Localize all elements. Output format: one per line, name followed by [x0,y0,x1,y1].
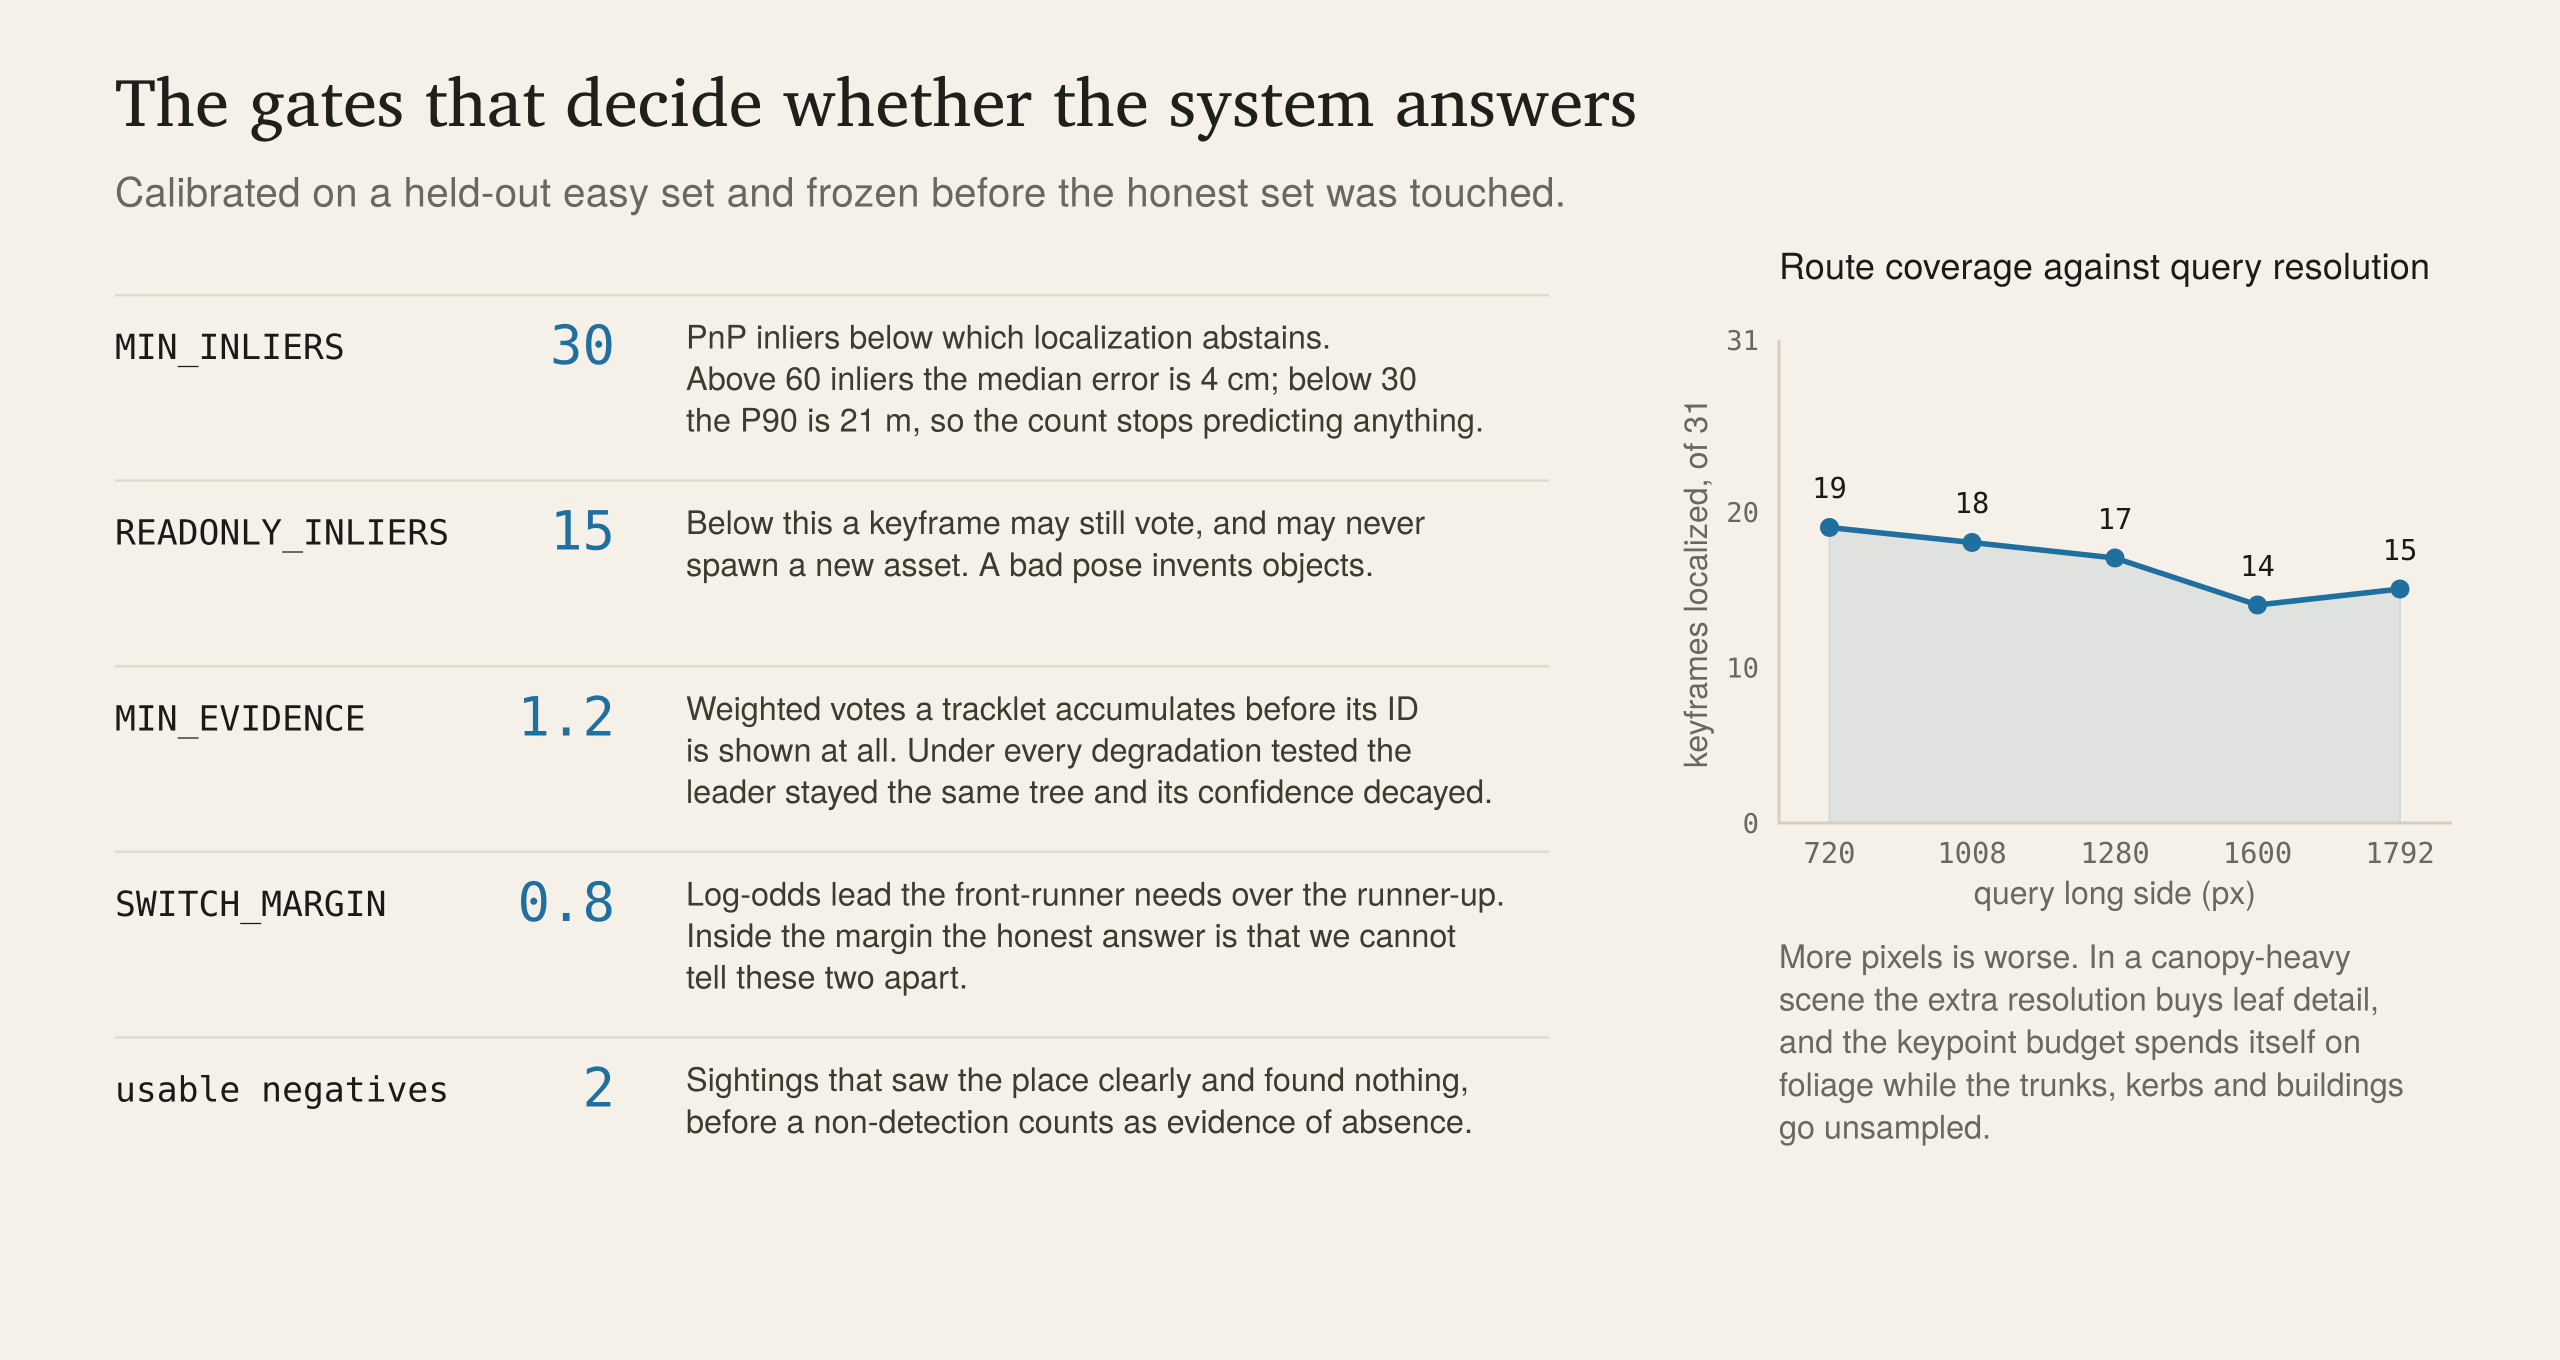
x axis ticks: 1792 [2365,836,2435,870]
row: READONLY_INLIERS: 15 [550,500,615,563]
row: MIN_EVIDENCE: MIN_EVIDENCE [115,699,366,739]
row: MIN_EVIDENCE: is shown at all. Under every degradation tested the [686,725,1412,771]
value labels: 19 [1812,471,1847,505]
row: SWITCH_MARGIN [115,850,1549,999]
line chart: route coverage [1671,326,2452,914]
chart caption [1779,932,2404,1148]
row: SWITCH_MARGIN: Inside the margin the honest answer is that we cannot [686,911,1456,957]
row: READONLY_INLIERS: Below this a keyframe may still vote, and may never [686,498,1425,544]
chart caption: More pixels is worse. In a canopy-heavy [1779,932,2351,978]
chart caption: go unsampled. [1779,1102,1991,1148]
y axis ticks: 0 [1743,809,1759,840]
x axis ticks: 1280 [2080,836,2150,870]
x axis ticks [1803,836,2435,870]
data points [1820,518,2410,614]
row: usable negatives: 2 [582,1057,615,1120]
row: READONLY_INLIERS: spawn a new asset. A bad pose invents objects. [686,540,1374,586]
row: MIN_EVIDENCE [115,665,1549,813]
row: MIN_INLIERS: PnP inliers below which localization abstains. [686,312,1331,358]
y axis ticks: 10 [1726,654,1759,684]
row: MIN_INLIERS: the P90 is 21 m, so the count stops predicting anything. [686,396,1484,442]
value labels: 14 [2240,549,2275,583]
row: MIN_EVIDENCE: leader stayed the same tree and its confidence decayed. [686,767,1493,813]
row: MIN_INLIERS: MIN_INLIERS [115,328,345,368]
y axis ticks [1726,326,1759,840]
row: SWITCH_MARGIN: SWITCH_MARGIN [115,885,386,925]
subtitle: Calibrated on a held-out easy set and frozen before the honest set was touched. [115,162,1566,218]
row: MIN_EVIDENCE: Weighted votes a tracklet accumulates before its ID [686,684,1419,730]
value labels: 17 [2098,502,2132,536]
title: The gates that decide whether the system answers [115,45,1637,156]
row: SWITCH_MARGIN: Log-odds lead the front-runner needs over the runner-up. [686,870,1505,916]
y axis ticks: 20 [1726,498,1759,529]
row: usable negatives: before a non-detection counts as evidence of absence. [686,1097,1473,1143]
axes [1779,340,2452,823]
x axis ticks: 1600 [2223,836,2292,870]
row: MIN_INLIERS [115,294,1549,442]
value labels [1812,471,2417,583]
value labels: 18 [1955,486,1989,520]
chart caption: scene the extra resolution buys leaf detail, [1779,975,2379,1021]
row: READONLY_INLIERS [115,479,1549,586]
value labels: 15 [2383,533,2417,567]
x axis ticks: 1008 [1937,836,2007,870]
row: MIN_INLIERS: 30 [550,314,615,377]
row: usable negatives [115,1036,1549,1143]
area under line [1830,528,2400,823]
row: SWITCH_MARGIN: tell these two apart. [686,953,968,999]
x axis ticks: 720 [1803,836,1856,870]
row: SWITCH_MARGIN: 0.8 [517,871,615,934]
y axis label: keyframes localized, of 31 [1671,398,1717,768]
x axis label: query long side (px) [1974,868,2256,914]
chart caption: and the keypoint budget spends itself on [1779,1017,2361,1063]
chart title: Route coverage against query resolution [1779,239,2430,290]
row: usable negatives: Sightings that saw the place clearly and found nothing, [686,1055,1469,1101]
y axis ticks: 31 [1726,326,1759,357]
row: MIN_INLIERS: Above 60 inliers the median error is 4 cm; below 30 [686,354,1417,400]
chart caption: foliage while the trunks, kerbs and buildings [1779,1060,2404,1106]
data line [1830,528,2400,605]
row: usable negatives: usable negatives [115,1071,449,1111]
panel: gates table [115,294,1549,1143]
row: READONLY_INLIERS: READONLY_INLIERS [115,514,449,554]
row: MIN_EVIDENCE: 1.2 [517,685,615,748]
